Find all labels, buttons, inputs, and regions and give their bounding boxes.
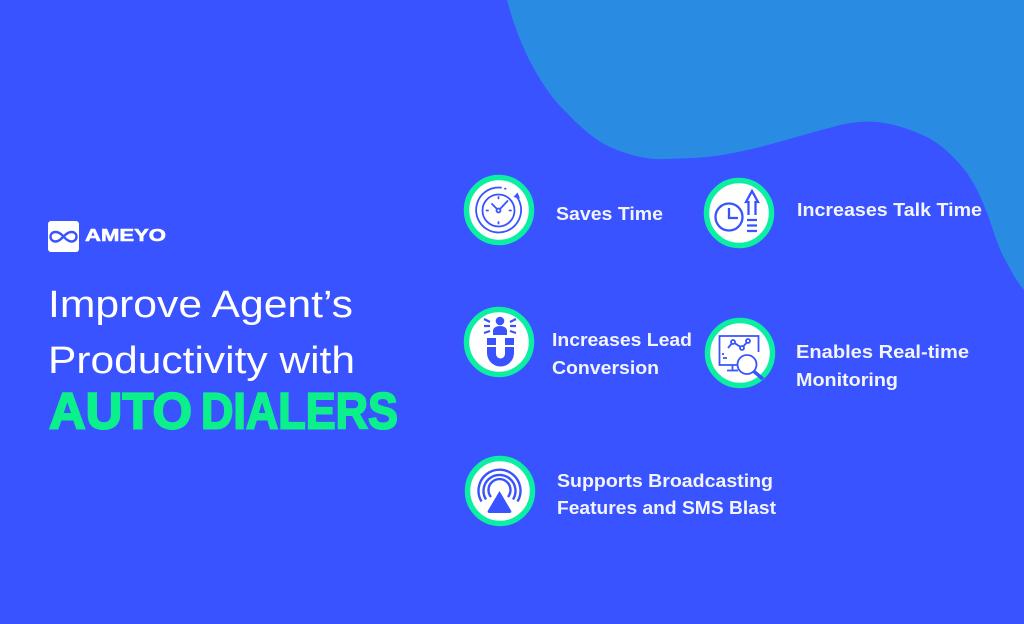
title highlight: AUTO	[49, 382, 192, 440]
title highlight	[49, 382, 398, 440]
title line 2: Productivity with	[48, 340, 355, 382]
item: increases talk time	[706, 180, 982, 246]
icon: magnet attracting person	[466, 310, 532, 374]
icon: clock with circular arrow	[466, 178, 532, 242]
title highlight: DIALERS	[201, 382, 398, 440]
item: enables real-time monitoring	[708, 320, 969, 390]
item: increases lead conversion	[466, 310, 692, 378]
label: Increases Talk Time	[797, 199, 982, 220]
label: Supports Broadcasting	[557, 470, 773, 491]
icon: clock with up arrow	[706, 180, 772, 246]
item: enables real-time monitoring: Monitoring	[796, 369, 898, 390]
item: increases lead conversion: Conversion	[552, 357, 659, 378]
label: Enables Real-time	[796, 341, 969, 362]
background blob	[507, 0, 1024, 290]
label: Saves Time	[556, 203, 663, 224]
title	[48, 284, 398, 440]
logo wordmark: AMEYO	[85, 225, 166, 245]
icon: broadcast signal	[468, 458, 532, 524]
label: Increases Lead	[552, 329, 692, 350]
logo: Ameyo	[48, 221, 166, 252]
logo icon	[48, 221, 79, 252]
item: supports broadcasting	[468, 458, 776, 524]
icon: monitor with magnifier	[708, 320, 772, 386]
item: supports broadcasting: Features and SMS Blast	[557, 497, 776, 518]
title line 1: Improve Agent’s	[48, 284, 353, 326]
item: saves time	[466, 178, 663, 242]
